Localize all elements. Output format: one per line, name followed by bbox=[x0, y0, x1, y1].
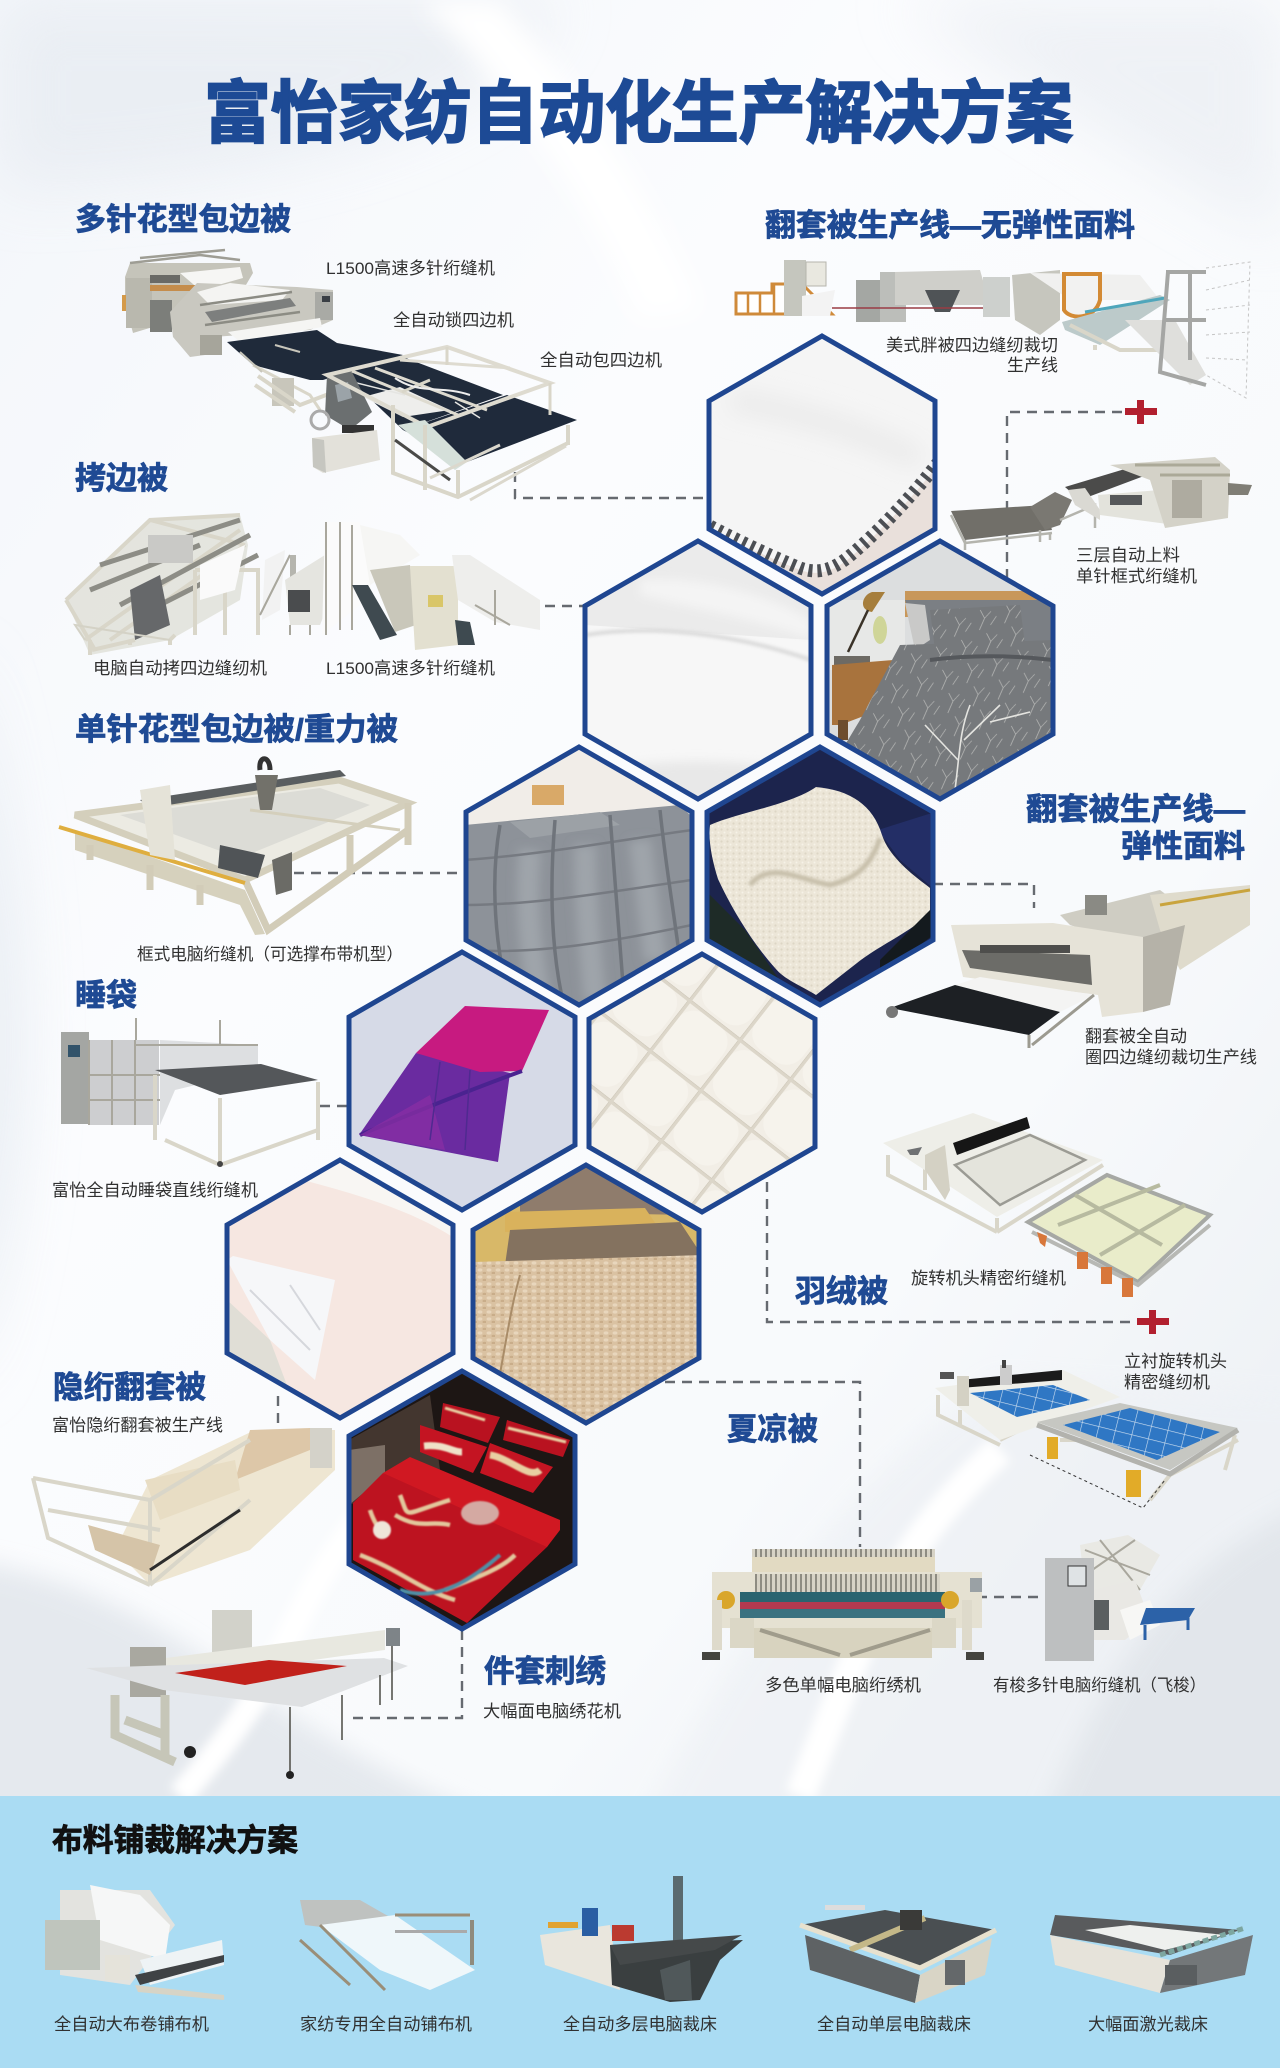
heading: multi-needle: 多针花型包边被 bbox=[75, 202, 291, 237]
title: 富怡家纺自动化生产解决方案 bbox=[204, 76, 1073, 152]
label: multi-colour quilter: 多色单幅电脑绗绣机 bbox=[765, 1676, 921, 1695]
label: wide embroidery: 大幅面电脑绣花机 bbox=[483, 1702, 621, 1721]
machine: multi-colour embroidery quilter bbox=[702, 1549, 984, 1660]
icon: red plus upper bbox=[1125, 400, 1157, 424]
label: three-layer feed: 单针框式绗缝机 bbox=[1076, 567, 1197, 586]
heading: embroidered set: 件套刺绣 bbox=[484, 1654, 606, 1689]
photo: magenta sleeping bag bbox=[345, 945, 580, 1215]
icon: red plus lower bbox=[1137, 1310, 1169, 1334]
heading: fabric spreading and cutting: 布料铺裁解决方案 bbox=[52, 1823, 298, 1858]
label: frame quilter: 框式电脑绗缝机（可选撑布带机型） bbox=[137, 945, 403, 964]
label: american comforter line bbox=[886, 336, 1058, 375]
connector lines bbox=[278, 412, 1135, 1718]
label: three-layer feed: 三层自动上料 bbox=[1076, 546, 1180, 565]
machine: hidden stitch line bbox=[33, 1428, 335, 1585]
label: american comforter line: 美式胖被四边缝纫裁切 bbox=[886, 336, 1058, 355]
heading: sleeping bag: 睡袋 bbox=[75, 978, 137, 1013]
heading: down quilt: 羽绒被 bbox=[795, 1274, 888, 1309]
machine: home textile spreader bbox=[300, 1900, 475, 1990]
label: auto four-side sewing line: 翻套被全自动 bbox=[1085, 1027, 1187, 1046]
machine: sleeping bag stitcher bbox=[61, 1018, 318, 1167]
heading: summer quilt: 夏凉被 bbox=[727, 1412, 818, 1447]
label: rotary head quilter: 旋转机头精密绗缝机 bbox=[911, 1269, 1066, 1288]
photo: grey weighted blanket bbox=[460, 740, 700, 1010]
photo: grey floral comforter bedroom bbox=[825, 535, 1060, 805]
label: multi-layer cutter: 全自动多层电脑裁床 bbox=[563, 2015, 717, 2034]
label: hidden stitch line: 富怡隐绗翻套被生产线 bbox=[52, 1416, 223, 1435]
label: american comforter line: 生产线 bbox=[1007, 356, 1058, 375]
machine: frame quilter bbox=[59, 759, 408, 935]
machine: standing rotary head quilter bbox=[935, 1360, 1238, 1508]
label: single-layer cutter: 全自动单层电脑裁床 bbox=[817, 2015, 971, 2034]
photo: sherpa fleece bbox=[700, 740, 940, 1010]
machine: shuttle multi-needle quilter bbox=[1045, 1535, 1195, 1661]
heading: edge quilt: 拷边被 bbox=[75, 461, 168, 496]
machine: single-layer cutter bbox=[800, 1905, 996, 2003]
heading: non-elastic line: 翻套被生产线—无弹性面料 bbox=[765, 208, 1135, 243]
panel: fabric spreading and cutting bbox=[0, 1796, 1280, 2068]
label: standing rotary head bbox=[1124, 1352, 1227, 1392]
machine: elastic fabric line bbox=[886, 885, 1250, 1048]
machine: rotary head quilter bbox=[883, 1113, 1210, 1297]
heading: single-needle quilt: 单针花型包边被/重力被 bbox=[75, 712, 398, 747]
machine: multi-needle quilting and binding line bbox=[122, 250, 577, 500]
label: auto binding: 全自动包四边机 bbox=[540, 351, 662, 370]
machine: edge sewing line bbox=[66, 515, 540, 655]
label: laser cutter: 大幅面激光裁床 bbox=[1088, 2015, 1208, 2034]
photo: white quilt with serged edge bbox=[700, 330, 940, 600]
label: L1500 quilter lower: L1500高速多针绗缝机 bbox=[326, 659, 495, 678]
heading: elastic line: 弹性面料 bbox=[1121, 829, 1245, 864]
machine: multi-layer cutter bbox=[540, 1876, 743, 2002]
label: auto locking: 全自动锁四边机 bbox=[393, 311, 514, 330]
label: three-layer feed bbox=[1076, 546, 1197, 586]
label: home textile spreader: 家纺专用全自动铺布机 bbox=[300, 2015, 472, 2034]
label: sleeping bag stitcher: 富怡全自动睡袋直线绗缝机 bbox=[52, 1181, 258, 1200]
photo: white pillow and duvet bbox=[580, 535, 815, 805]
label: shuttle quilter: 有梭多针电脑绗缝机（飞梭） bbox=[993, 1676, 1206, 1695]
heading: elastic line: 翻套被生产线— bbox=[1026, 792, 1245, 827]
label: standing rotary head: 立衬旋转机头 bbox=[1124, 1352, 1227, 1371]
machine: three-layer feed single-needle bbox=[951, 457, 1252, 550]
heading: elastic line bbox=[1026, 792, 1245, 864]
machine: laser cutter bbox=[1050, 1915, 1253, 1993]
photo: beige knit bedding bbox=[468, 1160, 705, 1430]
label: L1500 quilter top: L1500高速多针绗缝机 bbox=[326, 259, 495, 278]
photo: white down quilt bbox=[585, 950, 820, 1215]
label: computer edge sewing: 电脑自动拷四边缝纫机 bbox=[93, 659, 267, 678]
machine: big roll spreader bbox=[45, 1885, 224, 2000]
machine: comforter production line bbox=[736, 260, 1250, 398]
label: big roll spreader: 全自动大布卷铺布机 bbox=[54, 2015, 209, 2034]
photo: pale pink duvet bbox=[222, 1155, 457, 1425]
heading: hidden stitch quilt: 隐绗翻套被 bbox=[53, 1370, 206, 1405]
photo: red embroidered bedding bbox=[345, 1365, 580, 1635]
label: auto four-side sewing line: 圈四边缝纫裁切生产线 bbox=[1085, 1048, 1257, 1067]
machine: wide embroidery machine bbox=[86, 1610, 408, 1779]
label: auto four-side sewing line bbox=[1085, 1027, 1257, 1067]
label: standing rotary head: 精密缝纫机 bbox=[1124, 1373, 1210, 1392]
